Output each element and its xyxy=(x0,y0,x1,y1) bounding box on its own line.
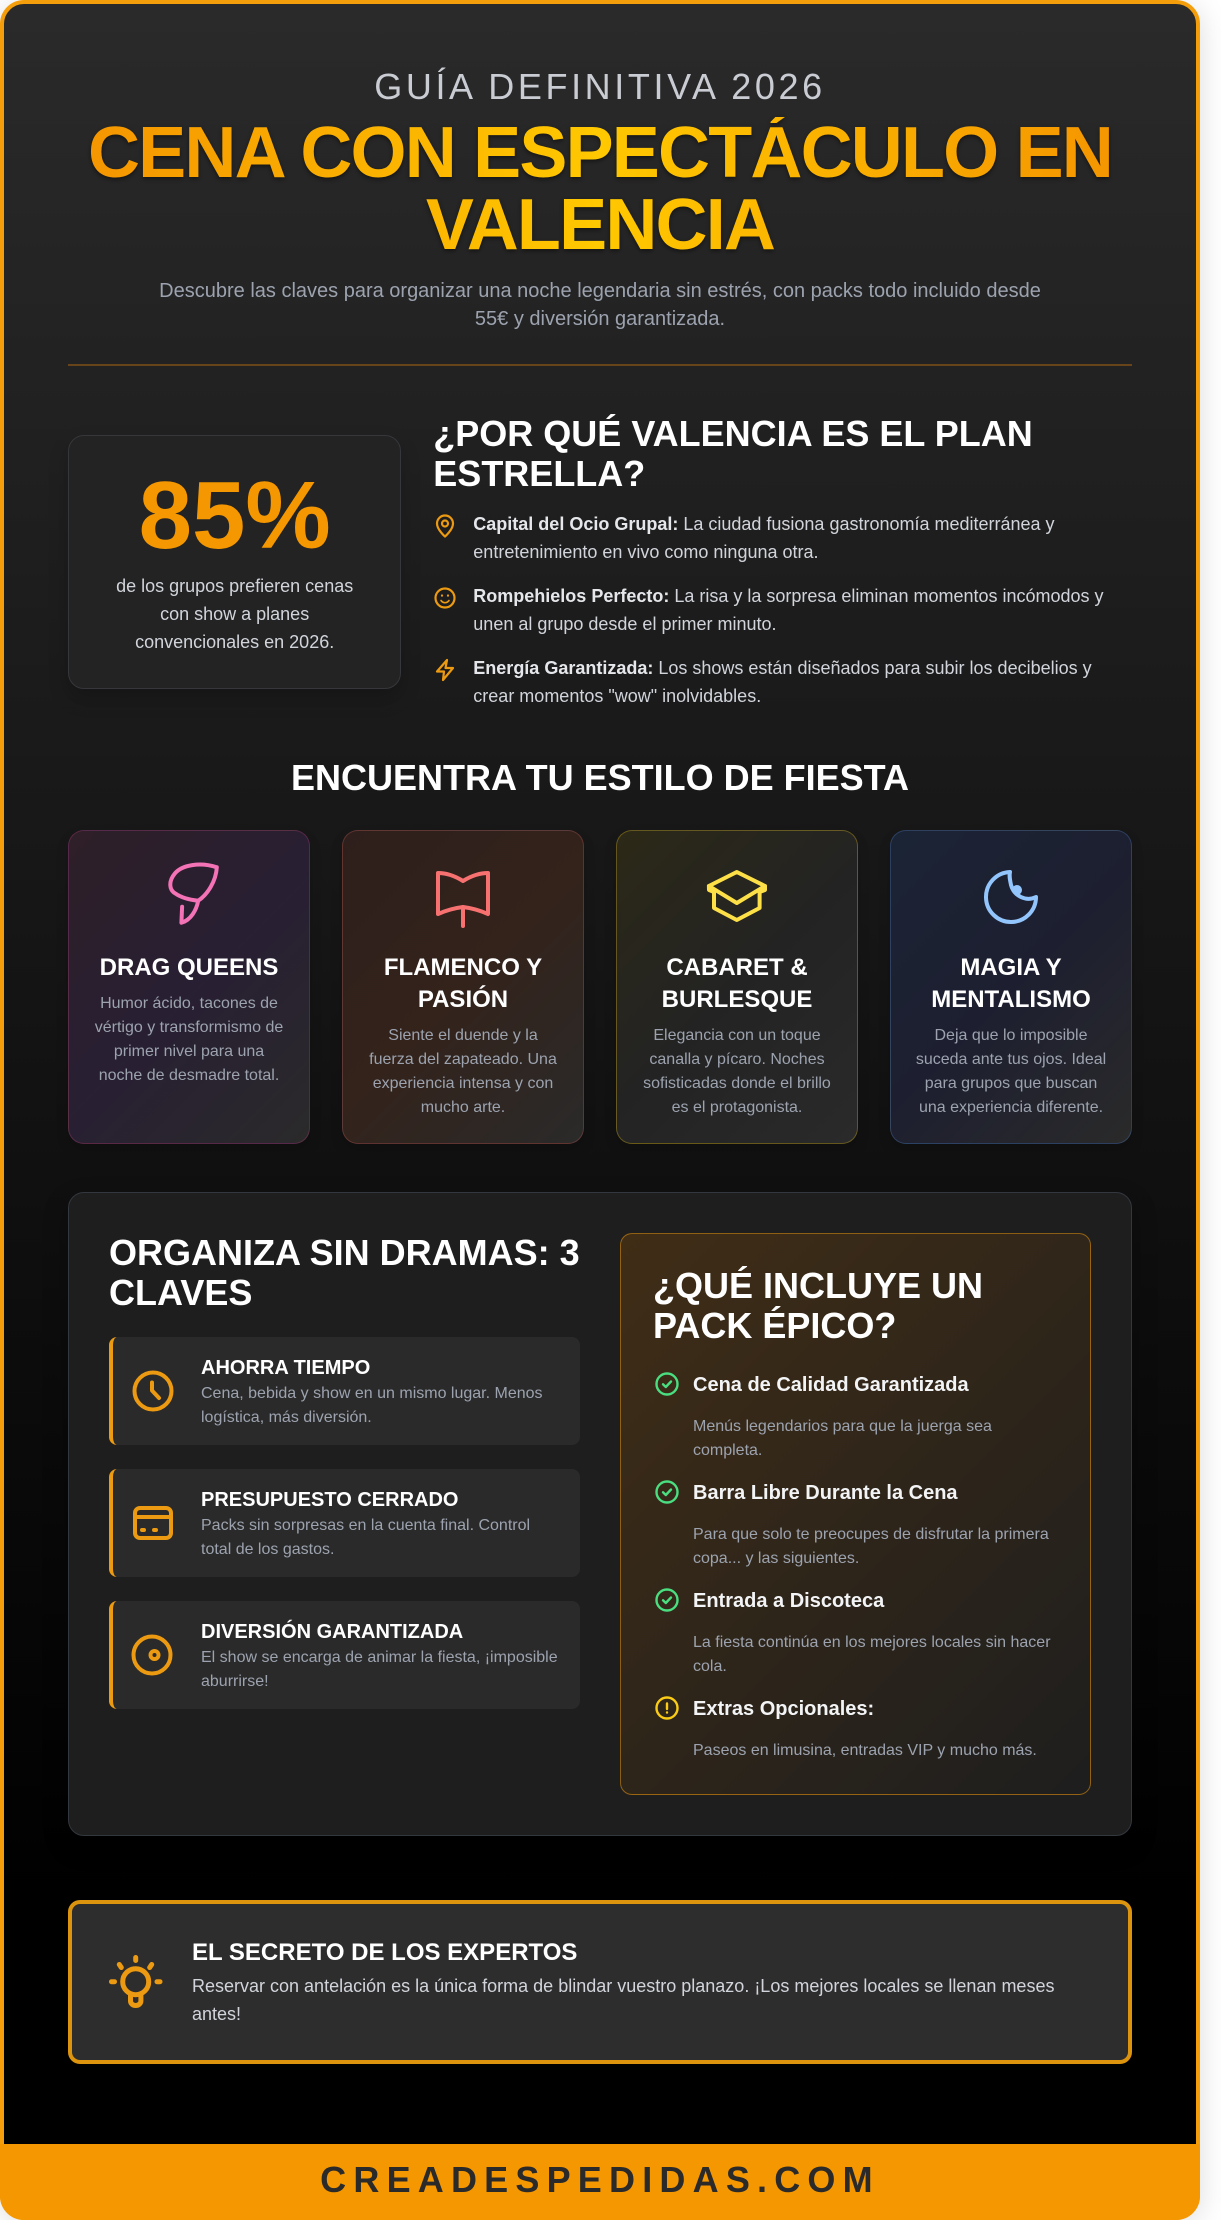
included: cena xyxy=(655,1372,992,1459)
included title: Cena de Calidad Garantizada xyxy=(693,1374,969,1396)
icon: open book xyxy=(436,871,490,928)
included: barra libre xyxy=(655,1480,1049,1567)
card title xyxy=(662,954,812,1013)
heading: pack: ¿QUÉ INCLUYE UN xyxy=(653,1265,983,1306)
card: magia xyxy=(890,830,1132,1144)
included text xyxy=(693,1418,992,1459)
heading: organiza: CLAVES xyxy=(109,1272,252,1313)
reason: energia: crear momentos "wow" inolvidables. xyxy=(473,686,761,706)
card title: PASIÓN xyxy=(418,986,508,1013)
icon: check xyxy=(655,1372,679,1396)
reason: energia: Energía Garantizada: Los shows están diseñados para subir los decibelios y xyxy=(473,658,1092,678)
card title: DRAG QUEENS xyxy=(100,954,278,981)
main title: CENA CON ESPECTÁCULO EN xyxy=(88,113,1112,193)
card text: suceda ante tus ojos. Ideal xyxy=(916,1051,1106,1068)
reason: rompehielos: unen al grupo desde el primer minuto. xyxy=(473,614,776,634)
heading: why Valencia: ESTRELLA? xyxy=(433,453,645,494)
icon: drag xyxy=(168,862,219,925)
intro paragraph xyxy=(159,280,1041,330)
heading: estilo de fiesta: ENCUENTRA TU ESTILO DE FIESTA xyxy=(291,757,909,798)
key title: AHORRA TIEMPO xyxy=(201,1357,370,1379)
key text: El show se encarga de animar la fiesta, ¡imposible xyxy=(201,1649,558,1666)
card text xyxy=(643,1027,831,1116)
key text: aburrirse! xyxy=(201,1673,269,1690)
panel: que incluye xyxy=(620,1233,1091,1795)
heading: why Valencia xyxy=(433,413,1033,494)
reason: capital del ocio: entretenimiento en vivo como ninguna otra. xyxy=(473,542,819,562)
included text: completa. xyxy=(693,1442,762,1459)
included: discoteca xyxy=(655,1588,1051,1675)
key text xyxy=(201,1517,530,1558)
key title: PRESUPUESTO CERRADO xyxy=(201,1489,458,1511)
card text: mucho arte. xyxy=(421,1099,505,1116)
icon: lightning bolt xyxy=(436,658,454,682)
main title: VALENCIA xyxy=(426,185,774,265)
callout text: Reservar con antelación es la única forma de blindar vuestro planazo. ¡Los mejores locales se llenan meses xyxy=(192,1976,1054,1996)
card text: noche de desmadre total. xyxy=(99,1067,279,1084)
card title xyxy=(384,954,542,1013)
card text: Siente el duende y la xyxy=(388,1027,538,1044)
heading: pack: PACK ÉPICO? xyxy=(653,1305,896,1346)
stat caption: con show a planes xyxy=(160,604,309,624)
stat caption: de los grupos prefieren cenas xyxy=(116,576,353,596)
card: drag queens xyxy=(68,830,310,1144)
included title: Extras Opcionales: xyxy=(693,1698,874,1720)
panel: organiza sin dramas and pack xyxy=(68,1192,1132,1836)
footer brand bar xyxy=(0,2144,1200,2220)
included text: cola. xyxy=(693,1658,727,1675)
card text: experiencia intensa y con xyxy=(373,1075,553,1092)
heading: organiza: ORGANIZA SIN DRAMAS: 3 xyxy=(109,1232,580,1273)
stat number: 85% xyxy=(139,462,331,569)
included text: Menús legendarios para que la juerga sea xyxy=(693,1418,992,1435)
icon: check xyxy=(655,1480,679,1504)
callout text xyxy=(192,1973,1112,2028)
eyebrow heading: GUÍA DEFINITIVA 2026 xyxy=(374,66,826,107)
icon: smile xyxy=(434,587,456,609)
card text: primer nivel para una xyxy=(114,1043,264,1060)
card title: BURLESQUE xyxy=(662,986,812,1013)
callout: el secreto de los expertos xyxy=(68,1900,1132,2064)
key text: Cena, bebida y show en un mismo lugar. Menos xyxy=(201,1385,543,1402)
footer brand bar: CREADESPEDIDAS.COM xyxy=(320,2159,880,2200)
icon: lightbulb xyxy=(100,1944,172,2016)
callout title: EL SECRETO DE LOS EXPERTOS xyxy=(192,1939,577,1966)
card title: FLAMENCO Y xyxy=(384,954,542,981)
included title: Barra Libre Durante la Cena xyxy=(693,1482,958,1504)
stat card: 85% xyxy=(68,435,401,689)
intro paragraph: Descubre las claves para organizar una noche legendaria sin estrés, con packs todo incluido desde xyxy=(159,280,1041,302)
card title: CABARET & xyxy=(666,954,808,981)
card text xyxy=(369,1027,557,1116)
reason: energia xyxy=(473,658,1092,706)
icon: warning xyxy=(655,1696,679,1720)
icon: clock xyxy=(132,1370,174,1412)
card: cabaret xyxy=(616,830,858,1144)
heading: pack xyxy=(653,1265,983,1346)
key: ahorra tiempo xyxy=(109,1337,580,1445)
card text: sofisticadas donde el brillo xyxy=(643,1075,831,1092)
included: extras xyxy=(655,1696,1037,1759)
card title: MAGIA Y xyxy=(960,954,1062,981)
icon: credit card xyxy=(133,1506,173,1540)
included text xyxy=(693,1634,1051,1675)
included title: Entrada a Discoteca xyxy=(693,1590,884,1612)
reason: rompehielos: Rompehielos Perfecto: La risa y la sorpresa eliminan momentos incómodos y xyxy=(473,586,1104,606)
callout text: antes! xyxy=(192,2004,241,2024)
key text xyxy=(201,1649,558,1690)
stat caption: convencionales en 2026. xyxy=(135,632,334,652)
card text xyxy=(94,995,283,1084)
included text xyxy=(693,1526,1049,1567)
icon: map pin xyxy=(436,514,454,538)
card text: para grupos que buscan xyxy=(925,1075,1097,1092)
card text xyxy=(916,1027,1106,1116)
included text: La fiesta continúa en los mejores locales sin hacer xyxy=(693,1634,1051,1651)
key: presupuesto cerrado xyxy=(109,1469,580,1577)
heading: why Valencia: ¿POR QUÉ VALENCIA ES EL PLAN xyxy=(433,413,1033,454)
card text: es el protagonista. xyxy=(672,1099,802,1116)
heading: organiza xyxy=(109,1232,580,1313)
reason: capital del ocio xyxy=(473,514,1055,562)
icon: moon xyxy=(984,870,1038,924)
reason: capital del ocio: Capital del Ocio Grupal: La ciudad fusiona gastronomía mediterránea y xyxy=(473,514,1055,534)
reason: rompehielos xyxy=(473,586,1104,634)
card: flamenco xyxy=(342,830,584,1144)
card text: Elegancia con un toque xyxy=(653,1027,821,1044)
key title: DIVERSIÓN GARANTIZADA xyxy=(201,1621,463,1643)
key text: Packs sin sorpresas en la cuenta final. Control xyxy=(201,1517,530,1534)
key: diversion garantizada xyxy=(109,1601,580,1709)
card text: una experiencia diferente. xyxy=(919,1099,1103,1116)
icon: target xyxy=(132,1634,172,1676)
key text: total de los gastos. xyxy=(201,1541,334,1558)
stat caption xyxy=(116,576,353,652)
card text: Deja que lo imposible xyxy=(934,1027,1087,1044)
card text: canalla y pícaro. Noches xyxy=(649,1051,825,1068)
card text: Humor ácido, tacones de xyxy=(100,995,278,1012)
key text xyxy=(201,1385,543,1426)
icon: check xyxy=(655,1588,679,1612)
card title xyxy=(931,954,1091,1013)
card title: MENTALISMO xyxy=(931,986,1091,1013)
main title xyxy=(88,113,1112,265)
card text: vértigo y transformismo de xyxy=(95,1019,283,1036)
included text: Para que solo te preocupes de disfrutar la primera xyxy=(693,1526,1049,1543)
key text: logística, más diversión. xyxy=(201,1409,372,1426)
intro paragraph: 55€ y diversión garantizada. xyxy=(475,308,725,330)
card text: fuerza del zapateado. Una xyxy=(369,1051,557,1068)
included text: Paseos en limusina, entradas VIP y mucho más. xyxy=(693,1742,1037,1759)
icon: cap xyxy=(706,870,768,922)
included text: copa... y las siguientes. xyxy=(693,1550,859,1567)
